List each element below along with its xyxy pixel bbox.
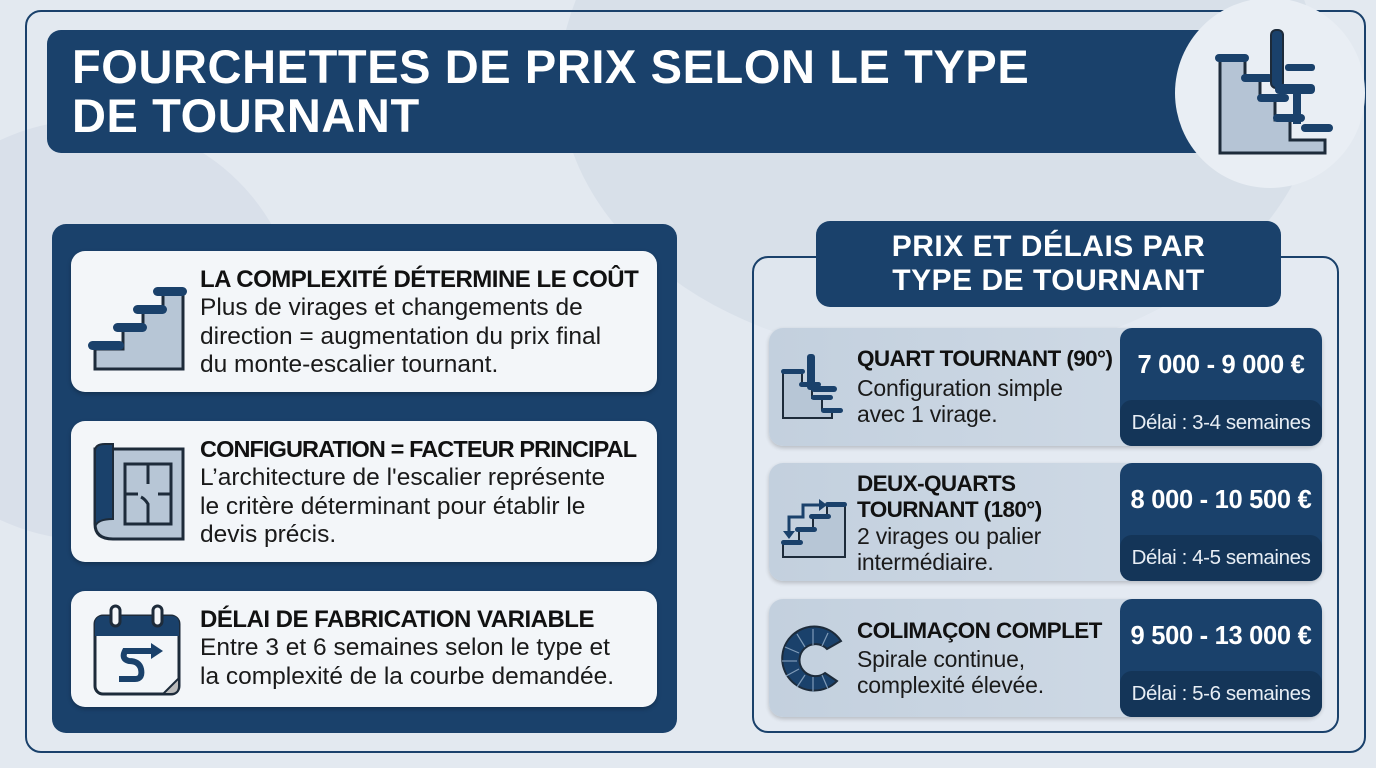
heading: TOURNANT (180°) xyxy=(857,497,1042,522)
heading: LA COMPLEXITÉ DÉTERMINE LE COÛT xyxy=(200,266,638,293)
card: configuration xyxy=(71,421,657,562)
heading: DÉLAI DE FABRICATION VARIABLE xyxy=(200,606,594,633)
heading: DEUX-QUARTS xyxy=(857,471,1015,496)
card: complexity xyxy=(71,251,657,392)
right panel header: TYPE DE TOURNANT xyxy=(892,264,1205,297)
title: FOURCHETTES DE PRIX SELON LE TYPE xyxy=(72,40,1029,93)
heading: CONFIGURATION = FACTEUR PRINCIPAL xyxy=(200,436,636,462)
text xyxy=(200,294,601,378)
right panel header: PRIX ET DÉLAIS PAR xyxy=(892,230,1205,263)
text: du monte-escalier tournant. xyxy=(200,351,498,378)
text: devis précis. xyxy=(200,521,336,548)
text: la complexité de la courbe demandée. xyxy=(200,662,614,690)
title xyxy=(72,40,1029,142)
text: Plus de virages et changements de xyxy=(200,294,583,321)
row: deux-quarts xyxy=(769,463,1322,581)
price box: Délai : 3-4 semaines xyxy=(1132,411,1310,434)
title banner xyxy=(47,30,1237,153)
card: delay xyxy=(71,591,657,707)
text xyxy=(857,523,1041,575)
text xyxy=(200,634,614,690)
title: DE TOURNANT xyxy=(72,89,420,142)
price box: 7 000 - 9 000 € xyxy=(1137,351,1305,379)
icon: calendar xyxy=(94,604,180,696)
text: complexité élevée. xyxy=(857,672,1044,698)
row: quart tournant xyxy=(769,328,1322,446)
text xyxy=(857,646,1044,698)
price box xyxy=(1120,328,1322,446)
price box: Délai : 4-5 semaines xyxy=(1132,546,1310,569)
row: colimaçon xyxy=(769,599,1322,717)
text: 2 virages ou palier xyxy=(857,523,1041,549)
panel: right price table xyxy=(752,256,1339,733)
text xyxy=(200,464,605,548)
price box: 8 000 - 10 500 € xyxy=(1131,486,1311,514)
text: Entre 3 et 6 semaines selon le type et xyxy=(200,634,610,661)
text: Configuration simple xyxy=(857,375,1063,401)
icon: stairlift xyxy=(781,354,843,419)
text: le critère déterminant pour établir le xyxy=(200,492,585,520)
price box xyxy=(1120,599,1322,717)
icon: spiral xyxy=(781,626,842,692)
text: avec 1 virage. xyxy=(857,401,997,427)
heading: COLIMAÇON COMPLET xyxy=(857,618,1102,643)
heading: QUART TOURNANT (90°) xyxy=(857,346,1112,371)
price box xyxy=(1120,463,1322,581)
icon: stairs with arrows xyxy=(781,499,847,558)
right panel header xyxy=(816,221,1281,307)
price box: Délai : 5-6 semaines xyxy=(1132,682,1310,705)
background decorative circles xyxy=(560,0,1320,360)
icon: stairlift circle xyxy=(1175,0,1365,188)
text: L’architecture de l'escalier représente xyxy=(200,464,605,491)
icon: floor plan xyxy=(94,443,184,540)
icon: stairs xyxy=(88,287,187,370)
heading xyxy=(857,471,1042,522)
text xyxy=(857,375,1063,427)
text: direction = augmentation du prix final xyxy=(200,322,601,350)
text: intermédiaire. xyxy=(857,549,994,575)
price box: 9 500 - 13 000 € xyxy=(1131,622,1311,650)
text: Spirale continue, xyxy=(857,646,1025,672)
panel: left key factors xyxy=(52,224,677,733)
